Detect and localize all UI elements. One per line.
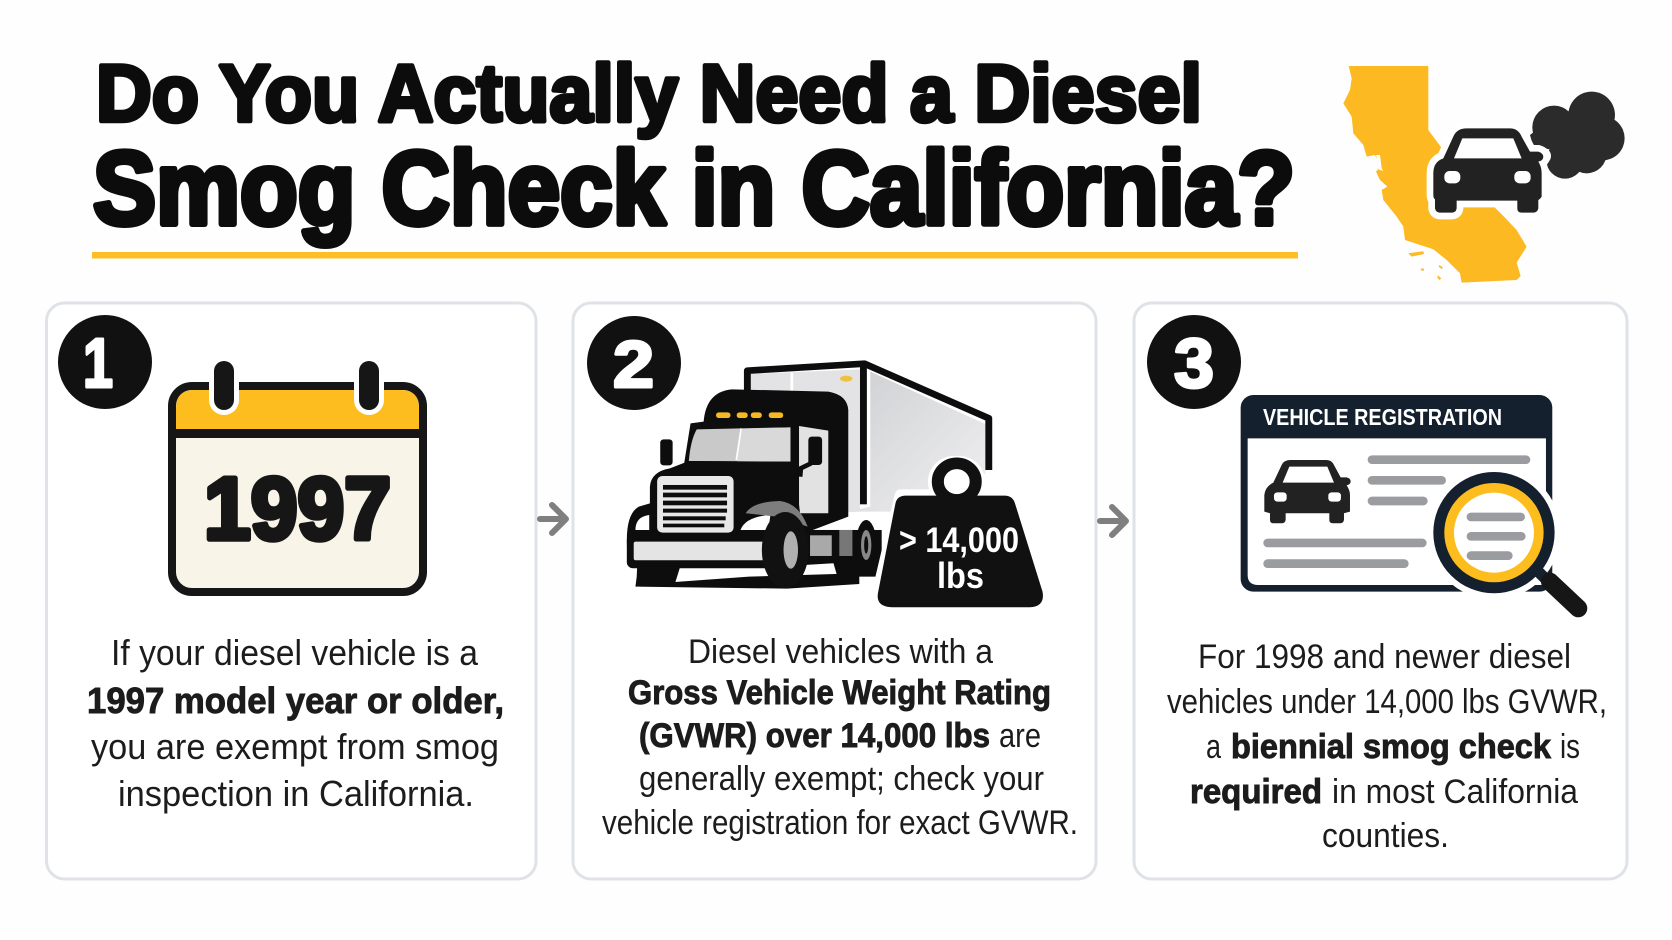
arrow: step 2 to 3 [1100,507,1126,535]
arrow: step 1 to 2 [540,505,566,533]
badge: number 2: 2 [613,327,654,401]
text block: step 3: counties. [1322,817,1449,855]
text block: step 1 [87,632,504,814]
text block: step 1: If your diesel vehicle is a [111,632,479,673]
text block: step 1: inspection in California. [118,773,474,814]
panel: step 1 model year [46,303,536,879]
small car [1264,460,1351,523]
smoke cloud [1530,92,1625,179]
icon: truck [627,364,1045,607]
text block: step 1: 1997 model year or older, [87,680,504,721]
text block: step 2: Diesel vehicles with a [688,633,993,671]
title: Smog Check in California? [93,131,1295,247]
text block: step 3: biennial smog check [1231,728,1551,766]
chassis [801,530,882,577]
badge: number 1 [58,315,152,409]
text block: step 2: vehicle registration for exact GVWR. [602,804,1078,842]
bumper [627,535,771,568]
icon: vehicle registration document with magnifier [1241,395,1578,608]
mirrors [660,439,673,465]
badge: number 3 [1147,315,1241,409]
text block: step 3: For 1998 and newer diesel [1198,638,1571,676]
card frame 2 [573,303,1096,879]
text block: step 3: is [1560,728,1580,766]
title [93,49,1295,247]
text block: step 2: generally exempt; check your [639,760,1044,798]
cab [684,389,848,533]
panel: step 2 truck weight [573,303,1096,879]
text block: step 2 [602,633,1078,842]
text block: step 2: Gross Vehicle Weight Rating [628,674,1051,712]
panel: step 3 registration [1134,303,1627,879]
text block: step 3 [1167,638,1607,855]
California silhouette [1343,66,1527,283]
icon: vehicle registration document with magnifier: VEHICLE REGISTRATION [1263,404,1502,430]
icon: California map with car and smoke [1343,66,1625,283]
text block: step 2: (GVWR) over 14,000 lbs [639,717,990,755]
text block: step 1: you are exempt from smog [91,726,499,767]
rear wheel [856,520,877,570]
title underline [92,252,1298,258]
icon: weight [878,463,1043,607]
hood [627,461,808,567]
badge: number 3: 3 [1174,324,1214,402]
text block: step 2: are [999,717,1041,755]
car [1433,128,1543,213]
weight halo [877,462,1045,607]
badge: number 1: 1 [83,324,113,402]
icon: weight: lbs [937,555,984,596]
magnifier [1427,466,1561,599]
title: Do You Actually Need a Diesel [96,49,1202,139]
icon: calendar 1997 [172,356,423,592]
text block: step 3: required [1190,773,1322,811]
card frame 3 [1134,303,1627,879]
icon: weight: > 14,000 [899,521,1019,560]
text block: step 3: a [1206,728,1221,766]
icon: calendar 1997: 1997 [204,459,391,558]
card frame 1 [46,303,536,879]
text block: step 3: in most California [1332,773,1578,811]
front wheel [762,512,809,588]
badge: number 2 [587,316,681,410]
text block: step 3: vehicles under 14,000 lbs GVWR, [1167,683,1607,721]
